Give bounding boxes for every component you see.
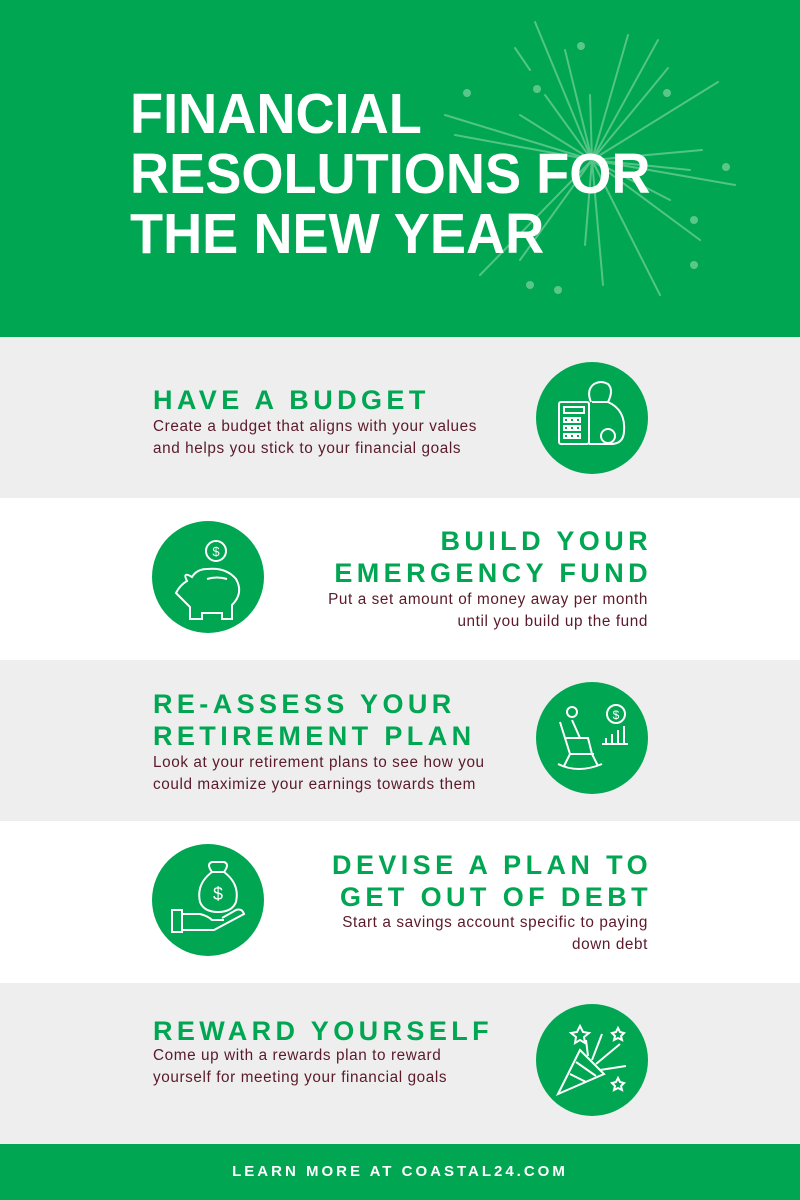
text: [153, 1047, 447, 1086]
text: could maximize your earnings towards them: [153, 776, 476, 793]
text: [328, 591, 648, 630]
icon: rocking chair: $: [613, 708, 620, 722]
text: down debt: [572, 936, 648, 953]
footer: [0, 1144, 800, 1200]
icon: piggy bank: $: [212, 544, 220, 559]
heading: [153, 689, 476, 751]
text: until you build up the fund: [457, 613, 648, 630]
firework decoration: [444, 21, 736, 296]
text: Put a set amount of money away per month: [328, 591, 648, 608]
heading: GET OUT OF DEBT: [340, 882, 652, 912]
heading: REWARD YOURSELF: [153, 1016, 493, 1046]
heading: [334, 526, 652, 588]
header: [0, 0, 800, 337]
icon: money in hand: [152, 844, 264, 956]
panel: emergency fund: [152, 521, 652, 633]
title: THE NEW YEAR: [130, 202, 544, 266]
text: [153, 754, 485, 793]
icon: rocking chair: [536, 682, 648, 794]
title: FINANCIAL: [130, 82, 422, 146]
icon: party popper: [536, 1004, 648, 1116]
icon: calculator and money bag: [536, 362, 648, 474]
panel: debt: [152, 844, 652, 956]
heading: BUILD YOUR: [440, 526, 652, 556]
icon: piggy bank: [152, 521, 264, 633]
text: yourself for meeting your financial goals: [153, 1069, 447, 1086]
text: Look at your retirement plans to see how you: [153, 754, 485, 771]
heading: HAVE A BUDGET: [153, 385, 430, 415]
heading: [332, 850, 652, 912]
panel: retirement: [0, 660, 800, 821]
title: [130, 82, 650, 266]
heading: EMERGENCY FUND: [334, 558, 652, 588]
text: Come up with a rewards plan to reward: [153, 1047, 441, 1064]
text: and helps you stick to your financial goals: [153, 440, 461, 457]
text: [153, 418, 477, 457]
heading: RE-ASSESS YOUR: [153, 689, 456, 719]
heading: RETIREMENT PLAN: [153, 721, 476, 751]
text: Start a savings account specific to paying: [342, 914, 648, 931]
title: RESOLUTIONS FOR: [130, 142, 650, 206]
panel: reward: [0, 983, 800, 1144]
footer: LEARN MORE AT COASTAL24.COM: [232, 1163, 568, 1180]
icon: money in hand: $: [213, 884, 223, 904]
panel: have a budget: [0, 337, 800, 498]
text: [342, 914, 648, 953]
heading: DEVISE A PLAN TO: [332, 850, 652, 880]
text: Create a budget that aligns with your values: [153, 418, 477, 435]
